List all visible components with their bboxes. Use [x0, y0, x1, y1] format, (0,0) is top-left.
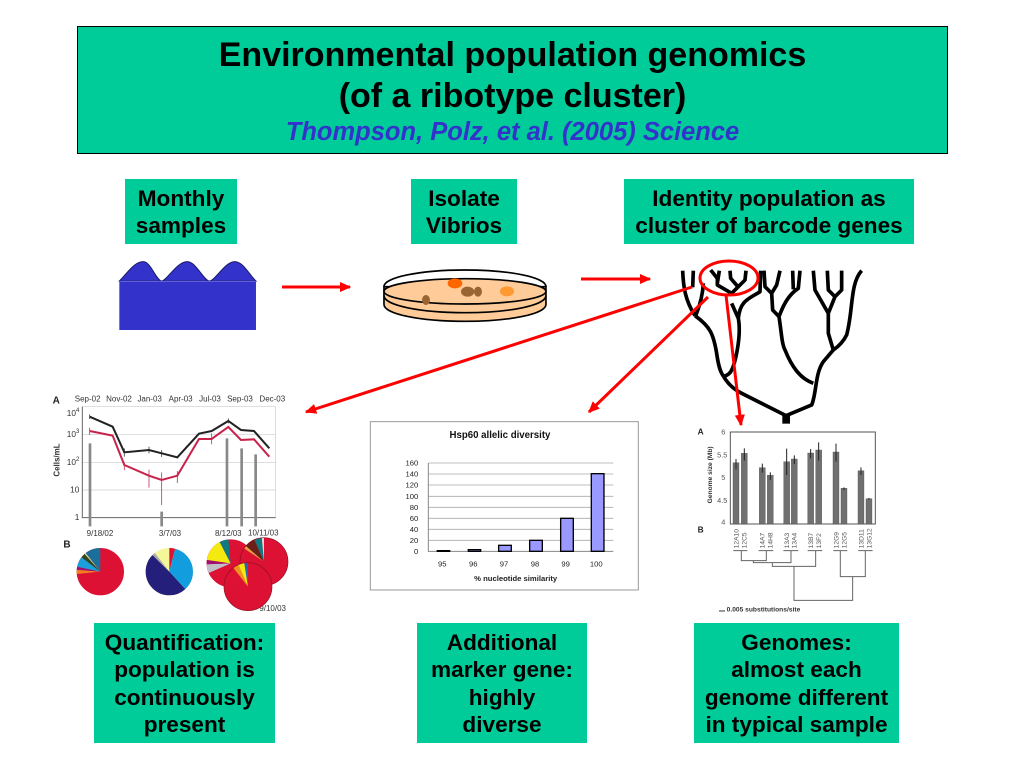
highlight ellipse on tree: [700, 261, 758, 295]
pie 9/10/03: [236, 575, 260, 599]
date labels: 10/11/03: [248, 528, 279, 537]
line chart and pies: vibrio abundance: [52, 394, 288, 613]
phylogenetic tree: [683, 270, 862, 424]
arrow: samples to isolates: [282, 286, 350, 288]
arrow: tree to abundance chart: [306, 287, 692, 412]
step box: monthly samples: [125, 179, 237, 244]
strain labels: 13B7: [808, 532, 815, 548]
strain labels: 13G12: [866, 528, 873, 548]
y axis labels: 10: [67, 457, 76, 467]
result box: quantification: population is: [114, 657, 255, 682]
title banner: [77, 26, 948, 154]
pie 9/18/02: [88, 560, 112, 583]
arrow: tree to genome chart: [726, 295, 741, 425]
month labels: Nov-02: [106, 394, 132, 403]
step box: identify population: Identity population as: [652, 186, 886, 211]
y axis values: 0: [414, 547, 418, 556]
step box: isolate vibrios: Isolate: [428, 186, 500, 211]
month labels: Jan-03: [137, 394, 162, 403]
result box: genomes: Genomes:: [741, 630, 852, 655]
date labels: 3/7/03: [159, 529, 182, 538]
strain labels: 13F2: [816, 533, 823, 548]
x axis title: % nucleotide similarity: [474, 574, 558, 583]
strain labels: 13A3: [784, 532, 791, 548]
strain labels: 12G9: [833, 532, 840, 548]
result box: quantification: present: [144, 712, 225, 737]
y axis labels: 10: [67, 429, 76, 439]
strain labels: 12C5: [742, 532, 749, 548]
strain labels: [733, 528, 873, 548]
y axis labels: [67, 408, 80, 522]
result box: additional marker gene: [417, 623, 587, 743]
y axis values: [717, 428, 727, 527]
step box: identify population: cluster of barcode genes: [635, 213, 903, 238]
pie 10/11/03: [252, 550, 276, 574]
strain labels: 12A10: [733, 529, 740, 548]
panel label B: B: [698, 525, 704, 535]
y axis values: 6: [721, 428, 725, 437]
arrow: tree to marker gene chart: [589, 297, 708, 412]
x axis values: 96: [469, 559, 478, 568]
pie 8/12/03: [219, 551, 243, 575]
y axis values: 120: [406, 481, 418, 490]
chart title: Hsp60 allelic diversity: [450, 430, 551, 441]
date labels: 9/18/02: [87, 529, 114, 538]
strain labels: 12G5: [841, 532, 848, 548]
date labels: [87, 528, 287, 613]
y axis title: Genome size (Mb): [707, 446, 714, 503]
arrow: isolates to tree: [581, 278, 650, 280]
y axis labels: 4: [76, 408, 80, 414]
y axis values: 40: [410, 525, 418, 534]
y axis values: 20: [410, 536, 418, 545]
y axis values: 4.5: [717, 496, 727, 505]
y axis values: 160: [406, 459, 418, 468]
y axis labels: 1: [75, 512, 80, 522]
month labels: Apr-03: [169, 394, 193, 403]
y axis labels: 2: [76, 457, 80, 463]
y axis labels: 10: [70, 484, 80, 494]
bars: [437, 474, 604, 551]
grid lines: [428, 463, 613, 540]
y axis values: 100: [406, 492, 418, 501]
y axis values: 5: [721, 473, 725, 482]
bars: [733, 450, 872, 524]
strain labels: 14A7: [760, 532, 767, 548]
x axis values: [438, 559, 603, 568]
step box: isolate vibrios: [411, 179, 517, 244]
date labels: 9/10/03: [259, 604, 287, 613]
scale label: 0.005 substitutions/site: [727, 606, 801, 613]
strain labels: 13A4: [792, 532, 799, 548]
panel label A: A: [53, 395, 60, 406]
step box: isolate vibrios: Vibrios: [426, 213, 502, 238]
step box: monthly samples: samples: [136, 213, 226, 238]
result box: genomes: genome different: [705, 685, 888, 710]
plot frame: [730, 432, 875, 524]
result box: quantification: [94, 623, 275, 743]
result box: additional marker gene: diverse: [462, 712, 542, 737]
result box: genomes: [694, 623, 899, 743]
x axis values: 95: [438, 559, 447, 568]
title line 1: Environmental population genomics: [219, 36, 806, 74]
bar chart and tree: genome sizes: [698, 427, 875, 613]
month labels: Jul-03: [199, 394, 221, 403]
y axis values: 60: [410, 514, 418, 523]
bar chart: Hsp60 allelic diversity: [370, 422, 638, 590]
panel label B: B: [63, 540, 71, 551]
month labels: Sep-03: [227, 394, 253, 403]
y axis values: 4: [721, 518, 725, 527]
title line 2: (of a ribotype cluster): [339, 77, 686, 115]
y axis values: 80: [410, 503, 418, 512]
citation: Thompson, Polz, et al. (2005) Science: [286, 118, 739, 146]
result box: additional marker gene: marker gene:: [431, 657, 573, 682]
x axis values: 99: [561, 559, 570, 568]
result box: genomes: in typical sample: [705, 712, 888, 737]
x axis values: 100: [590, 559, 603, 568]
month labels: [75, 394, 286, 403]
error bars: [736, 442, 869, 500]
result box: quantification: Quantification:: [105, 630, 264, 655]
x axis values: 98: [531, 559, 539, 568]
step box: monthly samples: Monthly: [138, 186, 224, 211]
strain labels: 14H8: [768, 532, 775, 548]
y axis title: Cells/mL: [52, 443, 61, 477]
result box: genomes: almost each: [731, 657, 862, 682]
month labels: Sep-02: [75, 394, 101, 403]
date labels: 8/12/03: [215, 529, 242, 538]
y axis values: [406, 459, 418, 556]
plot area: [82, 407, 276, 526]
icon: petri dish: [384, 270, 546, 321]
y axis values: 140: [406, 470, 418, 479]
month labels: Dec-03: [259, 394, 286, 403]
result box: additional marker gene: Additional: [447, 630, 557, 655]
y axis labels: 3: [76, 429, 80, 435]
result box: additional marker gene: highly: [469, 685, 535, 710]
strain labels: 13D11: [858, 529, 865, 548]
y axis labels: 10: [67, 408, 76, 418]
dendrogram: [733, 551, 873, 600]
step box: identify population: [624, 179, 914, 244]
scale bar: [719, 609, 725, 612]
pie 3/7/03: [157, 560, 181, 583]
panel label A: A: [698, 427, 704, 437]
result box: quantification: continuously: [114, 685, 255, 710]
x axis values: 97: [500, 559, 508, 568]
y axis values: 5.5: [717, 451, 727, 460]
icon: water sample: [119, 262, 257, 330]
